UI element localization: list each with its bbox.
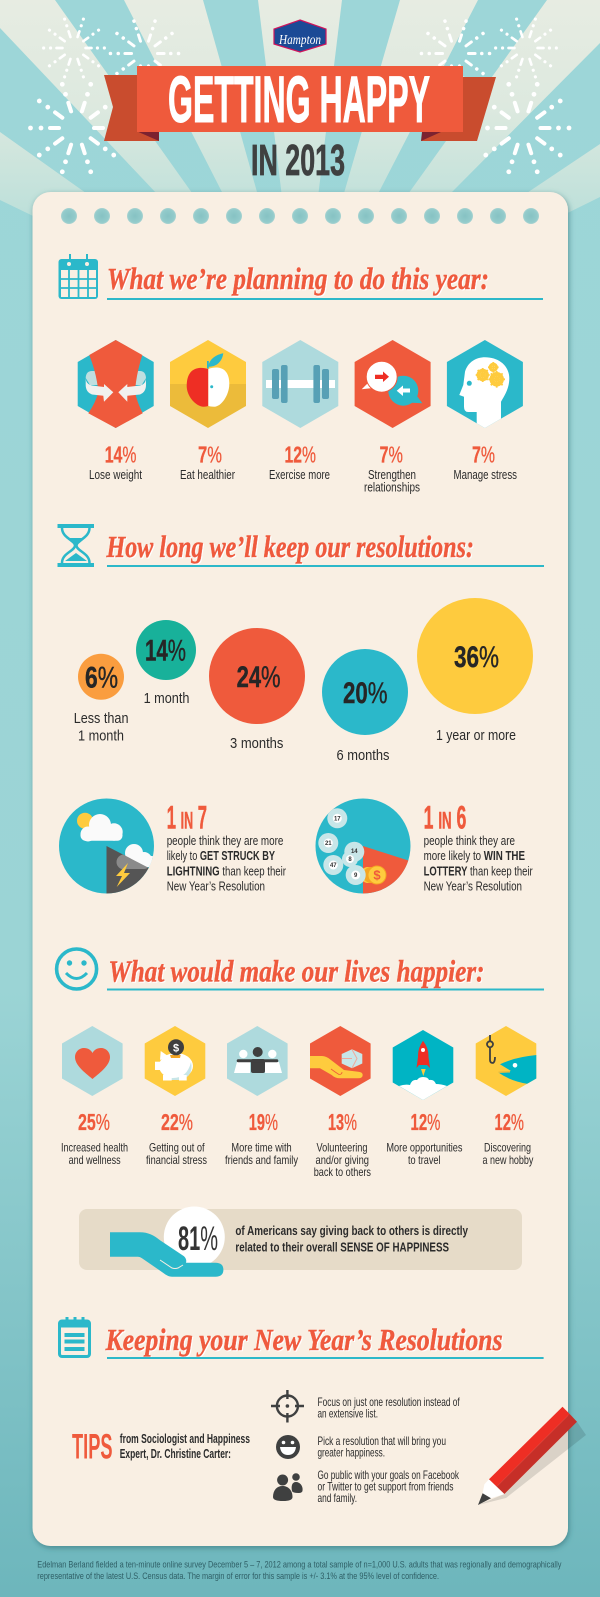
icon: lottery circle: 47 (330, 863, 337, 869)
hexagon: piggy bank (145, 1026, 205, 1096)
heading: happier section: What would make our lives happier: (108, 954, 484, 989)
icon: storm circle (59, 798, 156, 900)
icon: people (273, 1473, 303, 1501)
logo: Hampton (274, 20, 326, 52)
callout: 1 in 6 lottery: 1 IN 6 (424, 799, 466, 835)
stats: happiness percentages: Discovering (484, 1141, 531, 1155)
hexagon: eat healthier (170, 340, 246, 428)
icon: calendar (58, 254, 98, 299)
icon: notepad (60, 1317, 90, 1356)
bubble: 3 months: 24% (237, 661, 281, 694)
callout: 81 percent giving back (79, 1206, 522, 1277)
bubble chart: how long resolutions last (74, 598, 533, 764)
stats: planning percentages (89, 442, 517, 495)
tip 3: go public: or Twitter to get support from friends (318, 1480, 454, 1494)
stats: planning percentages: Exercise more (269, 468, 330, 482)
sunburst rays (0, 0, 600, 345)
stats: happiness percentages: More opportunities (386, 1141, 462, 1155)
title ribbon (104, 62, 496, 141)
icon: giving hand (110, 1232, 223, 1277)
callout: 1 in 7 lightning: LIGHTNING than keep their (167, 864, 286, 878)
icon: lottery circle: 8 (348, 857, 352, 863)
bubble: 1 year or more (417, 598, 533, 744)
stats: happiness percentages: to travel (408, 1153, 440, 1167)
callout: 1 in 6 lottery (316, 798, 533, 894)
bubble: 1 month: 14% (145, 635, 186, 668)
panel: five plans hexagons (78, 340, 523, 432)
heading: planning section: What we’re planning to do this year: (107, 261, 489, 296)
stats: happiness percentages: financial stress (146, 1153, 207, 1167)
bubble: less than 1 month: 6% (85, 661, 118, 694)
bubble: 1 month (136, 620, 196, 707)
panel: six happiness hexagons (62, 1026, 537, 1100)
stats: happiness percentages: 12% (494, 1109, 524, 1135)
icon: dark smiley (276, 1435, 300, 1459)
fireworks (28, 17, 571, 175)
icon: lottery circle: 17 (334, 816, 341, 822)
icon: lottery circle: 14 (351, 849, 358, 855)
heading: resolutions section (58, 524, 544, 567)
hexagon: exercise more (262, 340, 338, 428)
stats: happiness percentages: 19% (249, 1109, 278, 1135)
hexagon: rocket (393, 1030, 453, 1100)
stats: happiness percentages (61, 1109, 533, 1179)
stats: happiness percentages: Getting out of (149, 1141, 205, 1155)
footnote: representative of the latest U.S. Census data. The margin of error for this sample is +/- 3.1% at the 95% level of confidence. (37, 1571, 439, 1582)
callout: 1 in 7 lightning: New Year’s Resolution (167, 880, 265, 894)
tips intro (72, 1428, 250, 1467)
tip 1: focus: an extensive list. (318, 1406, 378, 1420)
bubble: 3 months: 3 months (230, 736, 283, 752)
tip 2: pick happiness (276, 1434, 446, 1460)
bubble: 6 months: 6 months (336, 748, 390, 764)
callout: 1 in 6 lottery: people think they are (424, 834, 515, 848)
tips intro: from Sociologist and Happiness (120, 1432, 250, 1446)
hexagon: friends and family (227, 1026, 288, 1096)
stats: planning percentages: 7% (380, 442, 403, 468)
stats: happiness percentages: and wellness (69, 1153, 121, 1167)
tip 1: focus: Focus on just one resolution instead of (318, 1395, 460, 1409)
callout: 81 percent giving back: 81% (178, 1220, 218, 1258)
heading: planning section (58, 254, 543, 300)
heading: tips section: Keeping your New Year’s Resolutions (105, 1322, 503, 1357)
bubble: 1 year or more: 1 year or more (436, 728, 516, 744)
hexagon: piggy bank: $ (173, 1042, 179, 1054)
stats: planning percentages: 7% (198, 442, 222, 468)
callout: 81 percent giving back: of Americans say giving back to others is directly (235, 1224, 468, 1238)
stats: planning percentages: Lose weight (89, 468, 142, 482)
stats: happiness percentages: More time with (231, 1141, 292, 1155)
stats: happiness percentages: friends and family (225, 1153, 298, 1167)
heading: resolutions section: How long we’ll keep our resolutions: (106, 529, 474, 564)
icon: hourglass (58, 524, 94, 567)
bubble: less than 1 month: Less than (74, 711, 128, 727)
callout: 1 in 7 lightning: 1 IN 7 (167, 799, 207, 835)
stats: happiness percentages: back to others (314, 1165, 371, 1179)
stats: happiness percentages: 22% (161, 1109, 193, 1135)
bubble: 3 months (209, 628, 305, 752)
icon: lottery circle (316, 798, 410, 894)
bubble: less than 1 month: 1 month (78, 729, 124, 745)
icon: crosshair (271, 1390, 304, 1422)
stats: happiness percentages: a new hobby (482, 1153, 533, 1167)
footnote (37, 1560, 562, 1582)
tips intro: Expert, Dr. Christine Carter: (120, 1447, 231, 1461)
icon: lottery circle: $ (373, 868, 381, 882)
hexagon: volunteering (310, 1026, 371, 1096)
tip 1: focus (271, 1390, 460, 1422)
stats: happiness percentages: and/or giving (316, 1153, 369, 1167)
tip 3: go public: and family. (318, 1491, 357, 1505)
bubble: 6 months (322, 649, 408, 764)
icon: lottery circle: 9 (354, 873, 358, 879)
bubble: 1 year or more: 36% (454, 641, 499, 674)
tip 2: pick happiness: greater happiness. (318, 1446, 385, 1460)
callout: 1 in 6 lottery: more likely to WIN THE (424, 849, 525, 863)
icon: lottery circle: 21 (325, 841, 332, 847)
bubble: 6 months: 20% (343, 677, 388, 710)
icon: pencil (478, 1407, 586, 1505)
hexagon: heart (62, 1026, 123, 1096)
stats: planning percentages: Manage stress (454, 468, 517, 482)
tips intro: TIPS (72, 1428, 112, 1467)
callout: 81 percent giving back: related to their overall SENSE OF HAPPINESS (235, 1240, 449, 1254)
callout: 1 in 7 lightning (59, 798, 286, 900)
hexagon: manage stress (447, 340, 523, 432)
stats: planning percentages: 12% (284, 442, 316, 468)
bubble: less than 1 month (74, 654, 128, 745)
stats: happiness percentages: 13% (328, 1109, 357, 1135)
stats: happiness percentages: Increased health (61, 1141, 128, 1155)
callout: 1 in 6 lottery: LOTTERY than keep their (424, 864, 533, 878)
tip 2: pick happiness: Pick a resolution that will bring you (318, 1434, 446, 1448)
logo: Hampton: Hampton (278, 33, 321, 48)
stats: planning percentages: 14% (105, 442, 136, 468)
binder holes (61, 208, 539, 224)
hexagon: hobby fish (476, 1026, 537, 1096)
stats: happiness percentages: 25% (78, 1109, 110, 1135)
stats: happiness percentages: 12% (410, 1109, 441, 1135)
stats: planning percentages: 7% (472, 442, 495, 468)
hexagon: lose weight (78, 340, 154, 428)
bubble: 1 month: 1 month (144, 691, 189, 707)
stats: planning percentages: Strengthen (368, 468, 416, 482)
stats: happiness percentages: Volunteering (316, 1141, 368, 1155)
hexagon: strengthen relationships (355, 340, 431, 428)
tip 3: go public: Go public with your goals on Facebook (318, 1468, 460, 1482)
icon: smiley (57, 949, 97, 989)
callout: 1 in 6 lottery: New Year’s Resolution (424, 880, 522, 894)
callout: 1 in 7 lightning: people think they are more (167, 834, 283, 848)
subtitle: IN 2013 (251, 136, 345, 185)
stats: planning percentages: Eat healthier (180, 468, 235, 482)
notebook card (32, 192, 568, 1546)
stats: planning percentages: relationships (364, 481, 420, 495)
tip 3: go public (273, 1468, 460, 1505)
callout: 1 in 7 lightning: likely to GET STRUCK BY (167, 849, 275, 863)
